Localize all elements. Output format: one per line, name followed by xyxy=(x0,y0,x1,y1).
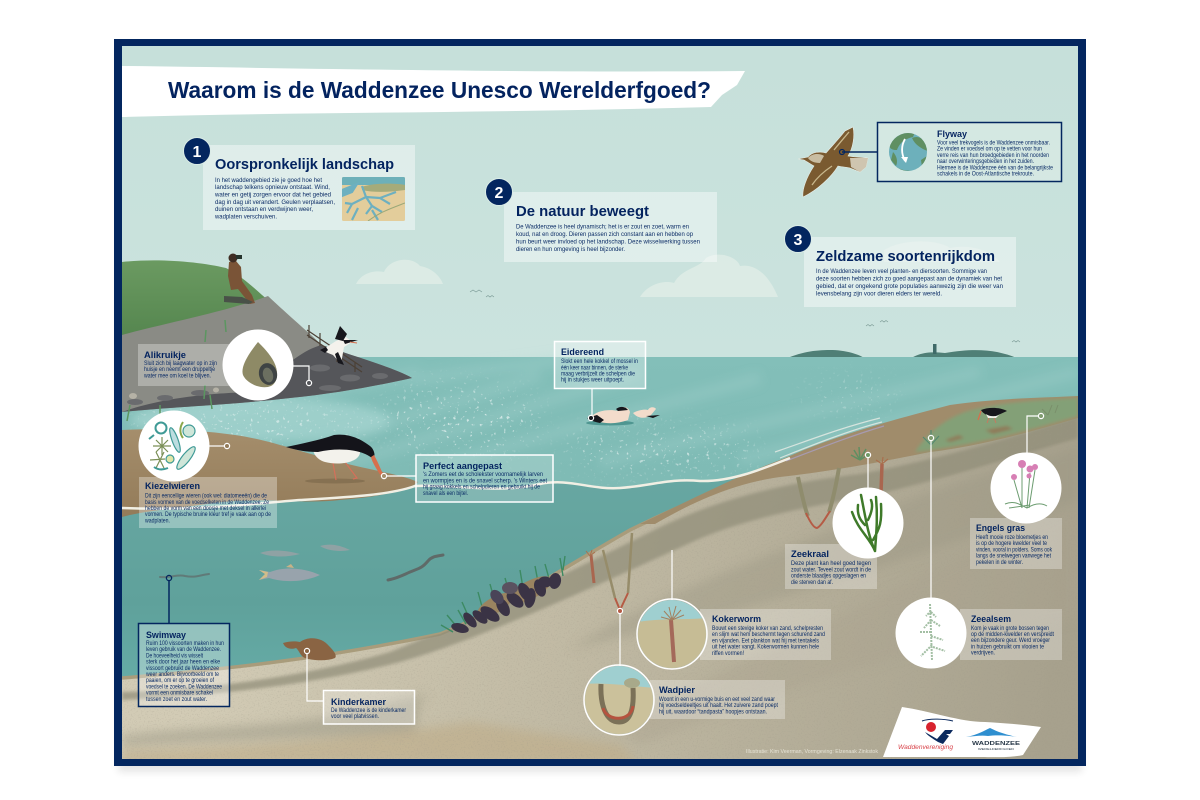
body text: Heeft mooie roze bloemetjes en xyxy=(976,535,1048,541)
heading: Oorspronkelijk landschap xyxy=(215,157,394,173)
body text: snavel als een bijtel. xyxy=(423,491,468,497)
shore foam xyxy=(775,418,882,458)
body text: en slijm wat hem beschermt tegen schurend zand xyxy=(712,632,825,638)
number badge 2 xyxy=(486,178,512,206)
icon: sea thrift xyxy=(990,452,1062,524)
callout: Kokerworm xyxy=(637,550,831,669)
body text: naar overwinteringsgebieden in het zuiden. xyxy=(937,159,1034,165)
logo: Waddenzee Werelderfgoed: WADDENZEE xyxy=(972,741,1021,747)
mussel bed xyxy=(441,556,565,635)
body text: Bouwt een stevige koker van zand, schelpresten xyxy=(712,626,823,632)
body text: hij voedseldeeltjes uit haalt. Het zuivere zand poept xyxy=(659,703,778,709)
heading: Wadpier xyxy=(659,685,695,696)
body text: onderste blaadjes opgeslagen en xyxy=(791,574,866,580)
water spray speckles xyxy=(130,370,902,485)
body text: Woont in een u-vormige buis en eet veel zand waar xyxy=(659,697,775,703)
body text: Dit zijn eencellige wieren (ook wel: diatomeeën) die de xyxy=(145,494,268,500)
scene illustration xyxy=(122,46,1078,765)
deep water foreground xyxy=(122,478,736,676)
poster shadow xyxy=(118,50,1082,772)
icon: periwinkle shell xyxy=(222,330,294,400)
islands on the horizon xyxy=(790,344,1014,357)
panel: 3 Zeldzame soortenrijkdom xyxy=(784,226,1016,307)
body text xyxy=(976,535,1053,566)
heading: Perfect aangepast xyxy=(423,461,503,472)
body text: Voor veel trekvogels is de Waddenzee onmisbaar. xyxy=(937,140,1050,146)
body text: hij uit, waardoor “tandpasta” hoopjes ontstaan. xyxy=(659,710,767,716)
number badge 2: 2 xyxy=(495,185,504,202)
callout: Zeealsem xyxy=(896,435,1062,668)
heading: Alikruikje xyxy=(144,350,186,361)
body text: en vijanden. Eet plankton wat hij met tentakels xyxy=(712,638,819,644)
body text: die sterven dan af. xyxy=(791,580,833,586)
heading: Zeealsem xyxy=(971,614,1011,625)
body text: levensbelang zijn voor dieren elders ter wereld. xyxy=(816,292,942,298)
green dune hill xyxy=(122,260,268,337)
left sandbank xyxy=(122,429,418,517)
connector xyxy=(290,366,312,386)
body text: weer anders. Bijvoorbeeld om te xyxy=(145,672,220,678)
heading: Eidereend xyxy=(561,347,604,358)
body text: basis vormen van de voedselketen in de Waddenzee. Ze xyxy=(145,500,270,506)
body text xyxy=(423,472,547,497)
number badge 3 xyxy=(784,226,812,252)
body text: is op de hogere kwelder veel te xyxy=(976,541,1048,547)
body text: koud, nat en droog. Dieren passen zich constant aan en hebben op xyxy=(516,232,694,238)
eels xyxy=(160,555,443,580)
icon: diatoms xyxy=(138,410,210,482)
body text: De Waddenzee is de kinderkamer xyxy=(331,708,406,714)
body text: langs de snelwegen vanwege het xyxy=(976,554,1051,560)
tidal channel map xyxy=(342,177,405,221)
reed tufts xyxy=(127,320,226,421)
body text: en wormpjes en is de snavel scherp. 's Winters eet xyxy=(423,478,547,484)
body text: hebben de vorm van een doosje met deksel in allerlei xyxy=(145,506,266,512)
body text: deze soorten hebben zich zo goed aangepast aan de dynamiek van het xyxy=(816,276,1002,282)
heading: Engels gras xyxy=(976,523,1025,534)
callout: Zeekraal xyxy=(785,452,904,589)
kokerworm tubes and lugworm burrows xyxy=(586,457,888,610)
body text: gebied, dat er ongekend grote populaties aanwezig zijn die weer van xyxy=(816,284,1003,290)
oystercatcher on marsh xyxy=(978,408,1007,423)
callout: Wadpier xyxy=(584,608,785,735)
heading: Kinderkamer xyxy=(331,697,386,708)
body text: Hiermee is de Waddenzee één van de belangrijkste xyxy=(937,165,1054,171)
body text: Sluit zich bij laagwater op in zijn xyxy=(144,361,217,367)
body text: Kom je vaak in grote bossen tegen xyxy=(971,626,1049,632)
logo: Waddenzee Werelderfgoed: WERELDERFGOED xyxy=(978,748,1014,751)
rocky dike xyxy=(122,296,412,412)
body text: water en getij zorgen ervoor dat het gebied xyxy=(214,192,331,198)
heading: De natuur beweegt xyxy=(516,204,649,220)
icon: glasswort xyxy=(832,488,904,558)
body text: Slokt een hele kokkel of mossel in xyxy=(561,359,638,365)
body text xyxy=(561,359,638,384)
panel: 1 Oorspronkelijk landschap xyxy=(184,138,415,230)
illustrator credit: Illustratie: Kim Veerman, Vormgeving: Elzenaak Zinkstok xyxy=(746,749,878,755)
flying oystercatcher xyxy=(320,326,358,365)
fish xyxy=(259,545,350,581)
number badge 1 xyxy=(184,138,210,164)
body text: dag in dag uit verandert. Geulen verplaatsen, xyxy=(215,200,335,206)
body text xyxy=(214,178,335,220)
heading: Zeekraal xyxy=(791,549,829,560)
body text: dieren en hun omgeving is heel bijzonder. xyxy=(516,247,625,253)
callout: Perfect aangepast xyxy=(381,455,553,502)
heading: Kokerworm xyxy=(712,614,761,625)
heading: Zeldzame soortenrijkdom xyxy=(816,249,995,265)
body text: voor veel platvissen. xyxy=(331,714,379,720)
small birds in the sky xyxy=(470,290,1020,342)
migrating bird xyxy=(798,127,868,197)
body text xyxy=(937,140,1054,178)
body text xyxy=(971,626,1054,656)
body text: hun beurt weer invloed op het landschap. Deze wisselwerking tussen xyxy=(516,240,700,246)
foam wave line xyxy=(122,458,790,509)
body text: voedsel te zoeken. De Waddenzee xyxy=(146,684,223,690)
icon: kokerworm in sand xyxy=(637,599,707,669)
body text: zout water. Teveel zout wordt in de xyxy=(791,567,872,573)
body text: duinen ontstaan en verdwijnen weer, xyxy=(215,207,313,213)
marsh plants xyxy=(851,405,1058,460)
body text: een bijzondere geur. Werd vroeger xyxy=(971,638,1050,644)
body text: sterk door het jaar heen en elke xyxy=(146,660,221,666)
body text: De hoeveelheid vis wisselt xyxy=(146,653,203,659)
body text: verdrijven. xyxy=(971,650,995,656)
person with binoculars xyxy=(224,254,255,304)
logo: Waddenvereniging xyxy=(898,719,953,751)
body text: hij in stukjes weer uitpoept. xyxy=(561,378,624,384)
body text: hij graag kokkels en schelpdieren en gebruikt hij de xyxy=(423,484,541,490)
icon: sea wormwood xyxy=(896,598,966,668)
heading: Kiezelwieren xyxy=(145,481,200,492)
wooden fence xyxy=(307,325,362,372)
body text xyxy=(144,494,272,524)
callout: Flyway xyxy=(840,122,1062,182)
body text: paaien, om er op te groeien of xyxy=(146,678,214,684)
body text: Ruim 100 vissoorten maken in hun xyxy=(146,641,224,647)
body text xyxy=(791,561,872,586)
eider ducks xyxy=(586,407,660,426)
panel: 2 De natuur beweegt xyxy=(486,178,717,262)
body text: maag verbrijzelt de schelpen die xyxy=(561,372,636,378)
number badge 3: 3 xyxy=(794,232,803,249)
body text: op de midden-kwelder en verspreidt xyxy=(971,632,1054,638)
callout: Engels gras xyxy=(970,413,1062,569)
body text: één keer naar binnen, de sterke xyxy=(561,365,629,371)
icon: lugworm burrow xyxy=(584,665,654,735)
body text: vinden, vooral in polders. Soms ook xyxy=(976,547,1053,553)
body text xyxy=(143,361,217,380)
callout: Alikruikje xyxy=(138,330,312,400)
body text: water mee om koel te blijven. xyxy=(143,374,211,380)
body text: riffen vormen! xyxy=(712,651,744,657)
body text: vormt een onmisbare schakel xyxy=(146,691,213,697)
sea surface xyxy=(122,357,1078,508)
body text: verre reis van hun broedgebieden in het noorden xyxy=(937,153,1049,159)
clouds xyxy=(356,254,778,297)
light streaks in the water xyxy=(302,360,1068,464)
callout: Eidereend xyxy=(554,342,646,421)
body text: De Waddenzee is heel dynamisch; het is er zout en zoet, warm en xyxy=(516,224,689,230)
connector xyxy=(208,443,230,449)
callout: Kiezelwieren xyxy=(138,410,277,528)
title banner xyxy=(122,66,745,117)
body text: landschap telkens opnieuw ontstaat. Wind, xyxy=(215,185,330,191)
beach and sand layers xyxy=(122,410,1078,765)
body text xyxy=(516,224,700,253)
callout: Swimway xyxy=(138,575,230,706)
body text xyxy=(816,269,1003,298)
body text: Ze vinden er voedsel om op te vetten voor hun xyxy=(937,147,1042,153)
sky xyxy=(122,46,1078,358)
green marsh vegetation xyxy=(915,398,1078,452)
body text: In de Waddenzee leven veel planten- en diersoorten. Sommige van xyxy=(816,269,987,275)
body text: leven gebruik van de Waddenzee. xyxy=(146,647,221,653)
heading: Flyway xyxy=(937,129,968,140)
heading: Swimway xyxy=(146,630,187,641)
body text: vissoort gebruikt de Waddenzee xyxy=(146,666,220,672)
upper brown salt marsh xyxy=(640,396,1078,524)
logo: Waddenvereniging: Waddenvereniging xyxy=(898,744,953,751)
body text: In het waddengebied zie je goed hoe het xyxy=(215,178,322,184)
body text xyxy=(659,697,778,716)
body text: vormen. De typische bruine kleur tref je vaak aan op de xyxy=(145,512,272,518)
flatfish xyxy=(283,638,336,660)
body text: wadplaten. xyxy=(144,518,170,524)
oystercatcher on sandbank xyxy=(286,435,384,484)
poster frame xyxy=(114,39,1086,766)
body text: 's Zomers eet de scholekster voornamelijk larven xyxy=(423,472,543,478)
body text: schakels in de Oost-Atlantische trekroute. xyxy=(937,172,1034,178)
body text: in huizen gebruikt om vlooien te xyxy=(971,644,1045,650)
body text: Deze plant kan heel goed tegen xyxy=(791,561,871,567)
body text: wadplaten verschuiven. xyxy=(214,214,277,220)
logos panel xyxy=(883,707,1041,757)
body text xyxy=(331,708,406,720)
body text: huisje en neemt een druppeltje xyxy=(144,367,216,373)
body text: tussen zoet en zout water. xyxy=(146,697,207,703)
logo: Waddenzee Werelderfgoed xyxy=(966,728,1021,751)
body text xyxy=(145,641,224,703)
basalt stones xyxy=(122,345,412,412)
title: Waarom is de Waddenzee Unesco Werelderfgoed? xyxy=(168,77,711,103)
icon: globe xyxy=(889,133,927,171)
body text: uit het water vangt. Kokerwormen kunnen hele xyxy=(712,645,820,651)
callout: Kinderkamer xyxy=(304,648,414,724)
body text: pekelen in de winter. xyxy=(976,560,1023,566)
number badge 1: 1 xyxy=(193,144,202,161)
body text xyxy=(712,626,825,657)
